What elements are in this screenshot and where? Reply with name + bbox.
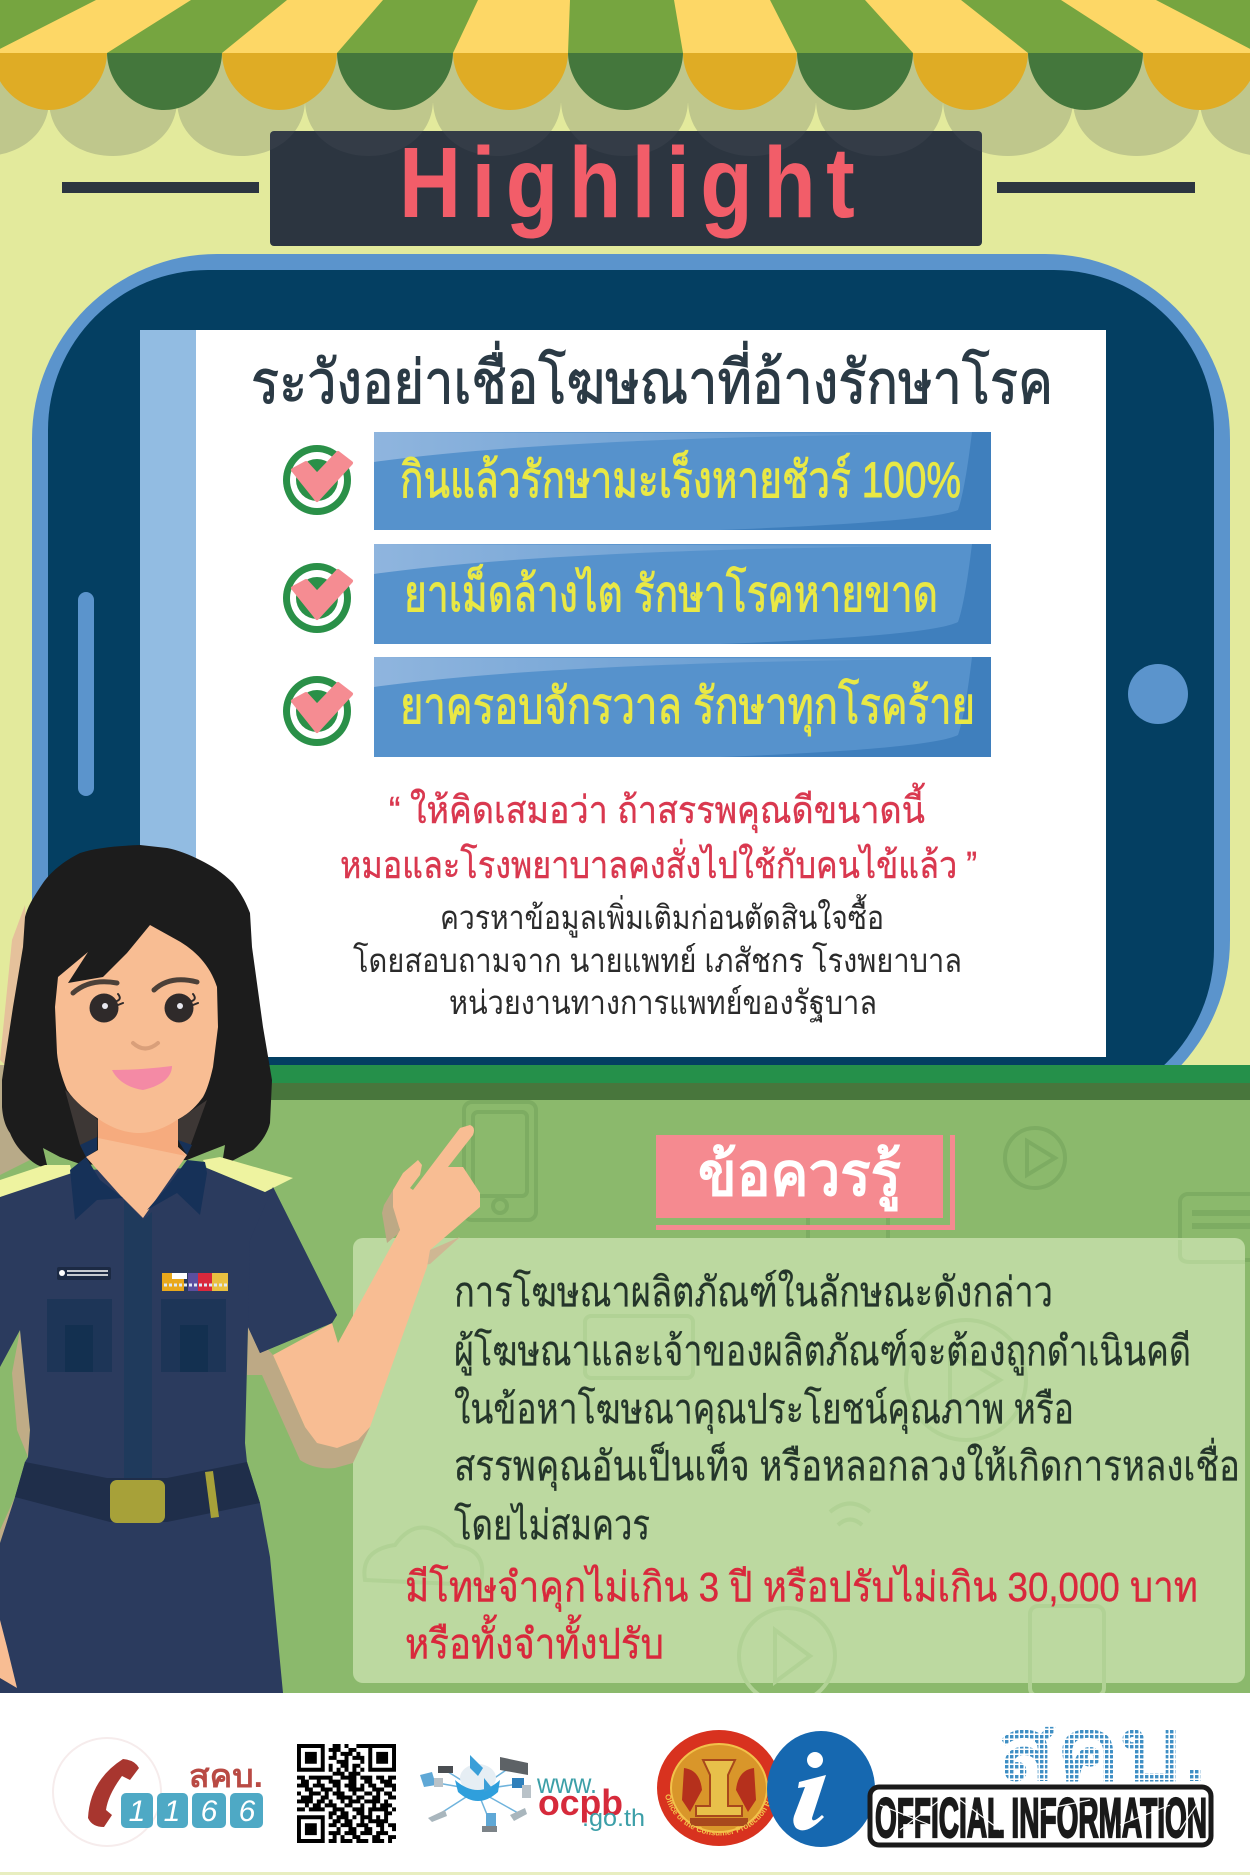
title: Highlight bbox=[399, 127, 855, 238]
pockets bbox=[47, 1299, 226, 1372]
character shadow bbox=[0, 905, 460, 1545]
raised arm bbox=[273, 1125, 480, 1448]
penalty text: หรือทั้งจำทั้งปรับ bbox=[405, 1614, 664, 1667]
warning quote: “ ให้คิดเสมอว่า ถ้าสรรพคุณดีขนาดนี้ bbox=[389, 782, 926, 833]
title bar rules bbox=[62, 182, 1195, 193]
title plate bbox=[270, 131, 982, 246]
claim bar: ยาเม็ดล้างไต รักษาโรคหายขาด bbox=[404, 564, 938, 622]
warning quote bbox=[340, 782, 977, 887]
hotline digits: 1 bbox=[164, 1795, 180, 1828]
lowered hand bbox=[0, 1620, 17, 1688]
section heading: what to know bbox=[656, 1135, 955, 1230]
logo: consumer protection seal: Office of the Consumer Protection Board bbox=[666, 1794, 770, 1836]
eyes bbox=[90, 994, 198, 1022]
uniform shirt bbox=[0, 1168, 337, 1693]
face bbox=[55, 925, 218, 1133]
section heading: what to know: ข้อควรรู้ bbox=[698, 1141, 901, 1212]
heading: ระวังอย่าเชื่อโฆษณาที่อ้างรักษาโรค bbox=[251, 341, 1053, 416]
nose bbox=[133, 1043, 158, 1048]
icon: check bbox=[283, 445, 351, 515]
neck shade bbox=[65, 1090, 207, 1147]
belt bbox=[15, 1462, 260, 1522]
legal body text bbox=[454, 1269, 1240, 1548]
neck bbox=[80, 1117, 192, 1218]
phone home button bbox=[1128, 664, 1188, 724]
faint panel icons bbox=[364, 1240, 1245, 1704]
hotline digits: 1 bbox=[129, 1795, 145, 1828]
hair back bbox=[2, 845, 272, 1167]
logo: info badge bbox=[767, 1731, 875, 1847]
hotline digits bbox=[121, 1793, 263, 1828]
belt strap bbox=[205, 1471, 219, 1518]
advice text: ควรหาข้อมูลเพิ่มเติมก่อนตัดสินใจซื้อ bbox=[440, 894, 884, 938]
claim row 2 bbox=[283, 544, 991, 644]
hotline digits: 6 bbox=[201, 1795, 218, 1828]
phone screen bbox=[140, 330, 1106, 1057]
hotline digits: 6 bbox=[239, 1795, 256, 1828]
green counter band bbox=[0, 1065, 1250, 1693]
claim bar bbox=[374, 657, 991, 757]
legal panel bbox=[353, 1238, 1245, 1704]
icon: phone handset bbox=[88, 1759, 139, 1827]
shoulder boards bbox=[0, 1157, 293, 1197]
placket bbox=[124, 1200, 152, 1480]
phone bbox=[32, 254, 1230, 1125]
icon: check bbox=[283, 676, 351, 746]
legal body text: ในข้อหาโฆษณาคุณประโยชน์คุณภาพ หรือ bbox=[454, 1386, 1074, 1434]
website text: ocpb bbox=[538, 1782, 623, 1823]
logo: dotted agency mark: สคบ. bbox=[997, 1700, 1208, 1799]
penalty text bbox=[405, 1564, 1198, 1667]
eyebrows bbox=[73, 980, 197, 993]
logo: consumer protection seal bbox=[657, 1730, 774, 1846]
ribbons bbox=[162, 1273, 228, 1291]
claim row 3 bbox=[283, 657, 991, 757]
mouth bbox=[112, 1066, 172, 1090]
legal body text: โดยไม่สมควร bbox=[454, 1502, 650, 1548]
advice text: หน่วยงานทางการแพทย์ของรัฐบาล bbox=[449, 984, 877, 1023]
claim bar: ยาครอบจักรวาล รักษาทุกโรคร้าย bbox=[400, 678, 975, 736]
legal body text: การโฆษณาผลิตภัณฑ์ในลักษณะดังกล่าว bbox=[454, 1269, 1053, 1315]
claim row 1 bbox=[283, 432, 991, 530]
website text: www. bbox=[536, 1768, 597, 1799]
name tag bbox=[57, 1267, 111, 1280]
QR code bbox=[297, 1744, 396, 1843]
logo: hotline 1166 bbox=[53, 1738, 263, 1846]
claim bar bbox=[374, 432, 991, 530]
awning bbox=[0, 0, 1250, 156]
phone speaker bar bbox=[78, 592, 94, 796]
advice text bbox=[353, 894, 962, 1023]
buckle bbox=[110, 1480, 165, 1523]
claim bar: กินแล้วรักษามะเร็งหายชัวร์ 100% bbox=[400, 450, 961, 508]
collar bbox=[70, 1157, 207, 1220]
logo: network globe bbox=[420, 1755, 645, 1832]
website text bbox=[536, 1768, 645, 1832]
website text: .go.th bbox=[582, 1805, 645, 1832]
warning quote: หมอและโรงพยาบาลคงสั่งไปใช้กับคนไข้แล้ว ” bbox=[340, 839, 977, 887]
background device icons bbox=[464, 1102, 1250, 1260]
logo: hotline 1166: สคบ. bbox=[189, 1758, 263, 1794]
advice text: โดยสอบถามจาก นายแพทย์ เภสัชกร โรงพยาบาล bbox=[353, 942, 962, 979]
officer character bbox=[0, 845, 480, 1693]
claim bar bbox=[374, 544, 991, 644]
icon: check bbox=[283, 563, 351, 633]
sleeve edge bbox=[248, 1187, 337, 1353]
